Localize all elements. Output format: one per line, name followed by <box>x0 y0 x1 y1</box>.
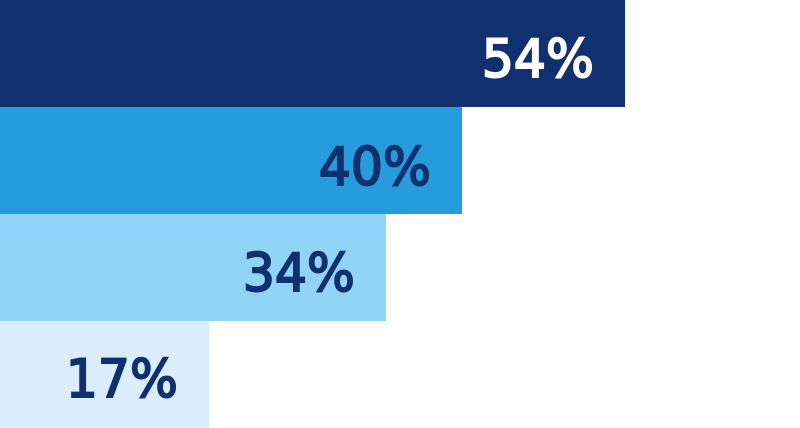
bar: 40% <box>0 107 462 214</box>
bar: 54%: 54% <box>482 29 594 90</box>
bar: 17%: 17% <box>66 349 178 410</box>
bar: 54% <box>0 0 625 107</box>
bar: 34%: 34% <box>243 243 354 304</box>
bar: 17% <box>0 321 208 428</box>
bar: 34% <box>0 214 386 321</box>
bar: 40%: 40% <box>319 137 430 198</box>
